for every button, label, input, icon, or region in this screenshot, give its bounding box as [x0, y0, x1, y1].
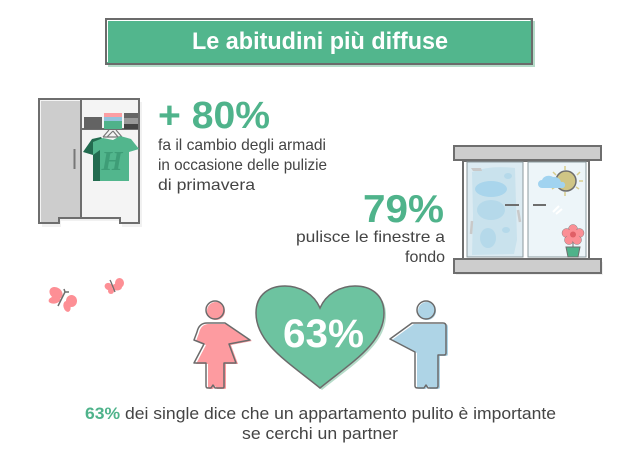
- stat description: windows: [296, 229, 445, 266]
- caption: se cerchi un partner: [242, 424, 398, 443]
- icon: flower pot: [562, 224, 584, 257]
- title banner: [106, 19, 535, 67]
- stat description: wardrobes: in occasione delle pulizie: [158, 157, 327, 174]
- caption: 63% dei single dice che un appartamento pulito è importante: [85, 404, 556, 423]
- stat description: wardrobes: [158, 137, 327, 194]
- icon: man: [390, 301, 448, 389]
- stat description: windows: fondo: [405, 249, 445, 266]
- stat: 80 percent: [158, 95, 327, 194]
- icon: butterfly right: [103, 278, 124, 294]
- icon: sun and cloud: [538, 166, 583, 196]
- icon: wardrobe: [39, 99, 142, 227]
- heart percentage label: 63%: [283, 312, 364, 356]
- icon: wardrobe: H: [100, 146, 123, 176]
- stat: 80 percent: + 80%: [158, 95, 270, 137]
- stat description: wardrobes: di primavera: [158, 177, 255, 194]
- stat: 79 percent: [296, 188, 445, 266]
- stat description: wardrobes: fa il cambio degli armadi: [158, 137, 326, 154]
- icon: heart with percentage: [256, 286, 386, 390]
- icon: window: [454, 146, 603, 275]
- icon: woman: [194, 301, 252, 389]
- stat: 79 percent: 79%: [363, 188, 444, 231]
- icon: butterfly left: [47, 284, 77, 313]
- title text: Le abitudini più diffuse: [192, 28, 448, 55]
- stat description: windows: pulisce le finestre a: [296, 229, 445, 246]
- caption: [85, 404, 556, 443]
